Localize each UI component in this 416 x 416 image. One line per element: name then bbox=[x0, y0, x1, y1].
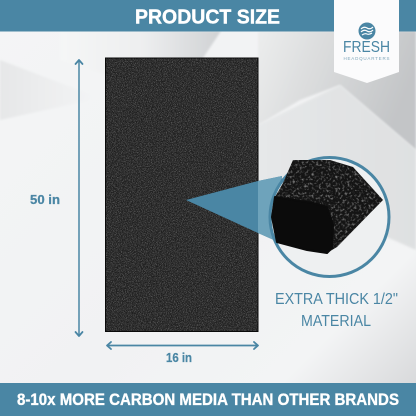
logo wordmark: FRESH bbox=[343, 39, 390, 56]
height dimension arrow bbox=[76, 60, 82, 336]
header title: PRODUCT SIZE bbox=[135, 6, 280, 28]
callout pointer bbox=[186, 176, 282, 241]
logo icon bbox=[358, 22, 376, 40]
header banner bbox=[0, 0, 416, 32]
callout caption: MATERIAL bbox=[301, 313, 371, 330]
width dimension arrow bbox=[107, 342, 258, 349]
logo ribbon bbox=[334, 0, 399, 83]
footer banner bbox=[0, 383, 416, 416]
callout caption bbox=[275, 291, 398, 330]
callout caption: EXTRA THICK 1/2" bbox=[275, 291, 398, 308]
carbon filter panel bbox=[105, 58, 258, 332]
height label: 50 in bbox=[30, 192, 60, 207]
foam block bbox=[270, 155, 386, 255]
width label: 16 in bbox=[166, 350, 192, 365]
logo subtitle: HEADQUARTERS bbox=[344, 56, 390, 61]
zoom circle bbox=[270, 155, 389, 276]
